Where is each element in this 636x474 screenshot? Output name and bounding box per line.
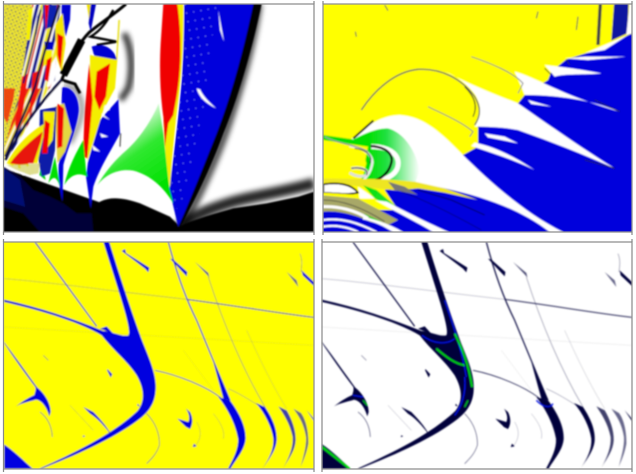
- dense striped field left of column B: [7, 4, 61, 160]
- green lobe with fade: [323, 128, 420, 183]
- dark speckle stripes top right: [596, 4, 602, 45]
- left speckled yellow area: [3, 4, 32, 165]
- yellow background: [323, 4, 632, 232]
- white gaps between columns: [47, 57, 56, 87]
- panel: bottom-right white map with black filaments: [322, 242, 632, 469]
- red stripe: [160, 4, 181, 147]
- white slivers in blue wedge: [197, 10, 224, 108]
- green lower lobes: [363, 185, 400, 210]
- yellow and red fan lower left: [7, 124, 44, 177]
- white oval with black rim: [323, 183, 358, 194]
- column A: red: [83, 63, 110, 158]
- blue outline inside filaments: [353, 300, 553, 415]
- yellow wedge and rings in lobe: [323, 137, 398, 180]
- blue fractal filaments: [4, 242, 314, 469]
- yellow background: [3, 242, 314, 469]
- column C: [43, 5, 57, 30]
- upper-right blue strip: [611, 4, 629, 41]
- green highlights: [322, 334, 472, 469]
- blue wedge: [169, 4, 253, 227]
- black bottom region with soft scalloped edge: [3, 167, 314, 232]
- panel: top-left multicolour parameter map: [3, 4, 314, 232]
- column B yellow: [55, 13, 66, 72]
- panel: bottom-left yellow and blue map: [3, 242, 314, 469]
- white lower bands: [363, 200, 449, 232]
- white third ridge: [515, 72, 620, 112]
- black band of blue wedge: [175, 4, 262, 228]
- green B: [48, 157, 60, 187]
- blue region: [370, 33, 632, 232]
- column A: yellow: [87, 55, 117, 162]
- black fine edges: [361, 69, 479, 125]
- white petal: [358, 187, 375, 199]
- black crescent: [121, 33, 131, 100]
- top yellow and blue at column A: [87, 4, 91, 20]
- white second ridge: [445, 72, 615, 168]
- black streaks: [62, 4, 126, 80]
- lower-left stripes: [323, 195, 398, 232]
- panel: top-right yellow/blue/white map: [323, 4, 632, 232]
- column B red: [57, 33, 64, 148]
- blue wedge lighter speckle: [170, 4, 217, 213]
- white spikes in blue: [471, 100, 551, 170]
- green A: [64, 140, 87, 185]
- dark glow to the right of blue wedge: [182, 4, 258, 228]
- white flecks: [92, 105, 110, 152]
- dense yellow-red field lower left: [4, 88, 42, 157]
- yellow speckled strip tapering to the right: [323, 178, 478, 200]
- dark filaments: [322, 242, 632, 469]
- white main ridge: [351, 115, 563, 232]
- column B blue lobe with black rim: [63, 86, 82, 143]
- green fan centre: [97, 103, 173, 203]
- column A: black crown and blue lobe: [116, 20, 120, 60]
- yellow stripe: [163, 4, 183, 188]
